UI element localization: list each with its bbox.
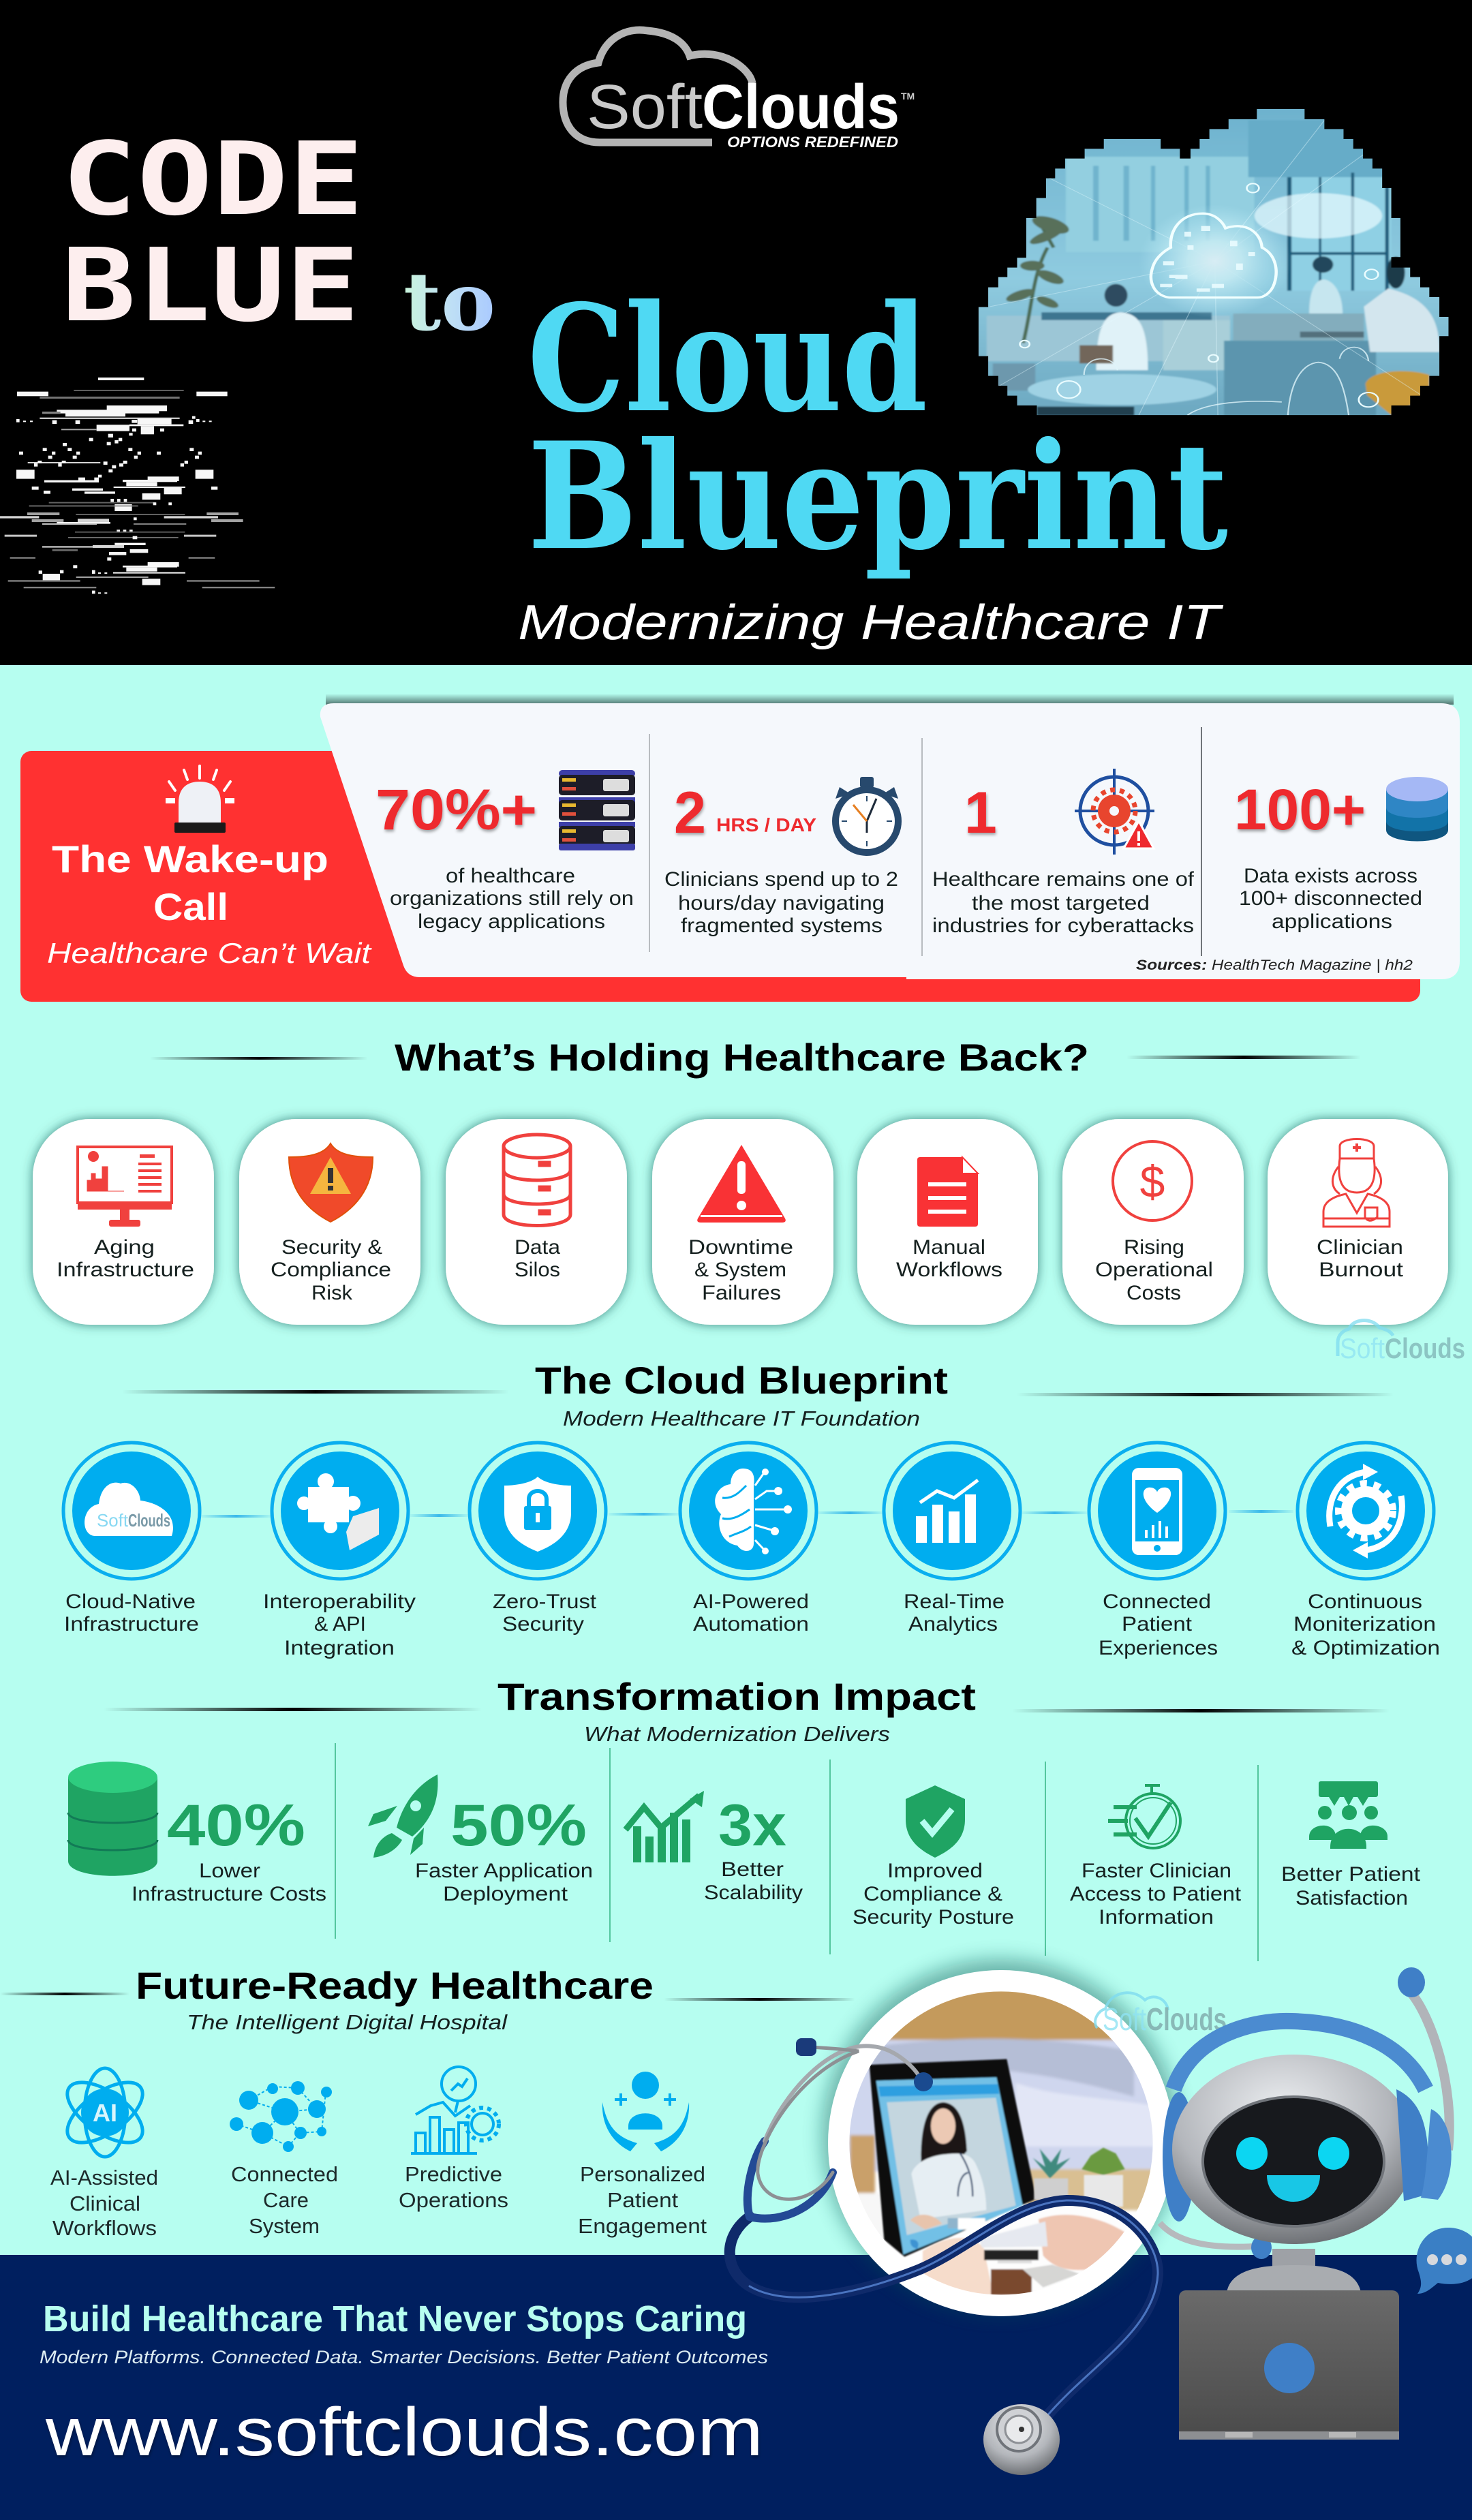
metric: compliance: Compliance &	[863, 1883, 1002, 1905]
image: pixelated cloud photo	[975, 102, 1452, 422]
card: data silos: Silos	[515, 1259, 560, 1281]
icon: cloud logo: Soft	[97, 1510, 129, 1531]
icon: database	[1386, 777, 1448, 841]
stat: 2 hrs/day: hours/day navigating	[678, 892, 885, 915]
metric: clinician access: Access to Patient	[1070, 1883, 1242, 1905]
item: connected care system	[230, 2081, 338, 2238]
metric: 40%: Lower	[199, 1860, 260, 1882]
item: ai-assisted clinical workflows: Workflows	[52, 2216, 157, 2240]
metric: compliance: Improved	[887, 1860, 983, 1882]
panel: future-ready items	[50, 2067, 707, 2240]
call to action heading: Build Healthcare That Never Stops Caring	[43, 2299, 747, 2339]
stat: 2 hrs/day: Clinicians spend up to 2	[664, 868, 898, 891]
icon: bar chart	[916, 1480, 978, 1543]
laptop	[1179, 2290, 1399, 2440]
card: rising operational costs: Rising	[1124, 1236, 1184, 1259]
panel: the wake-up call	[20, 694, 1460, 1002]
icon: growth chart	[626, 1791, 704, 1862]
icon: rocket	[368, 1774, 438, 1858]
hero panel	[0, 0, 1472, 665]
metric: patient satisfaction: Better Patient	[1281, 1863, 1421, 1886]
item: ai-assisted clinical workflows	[50, 2068, 158, 2240]
logo: SoftClouds: Soft	[587, 72, 703, 142]
item: continuous monitoring: & Optimization	[1291, 1637, 1440, 1659]
item: ai-powered automation	[680, 1443, 816, 1635]
icon: stethoscope	[730, 2038, 1158, 2418]
chat bubble	[1417, 2228, 1472, 2294]
card: rising operational costs: Operational	[1095, 1259, 1213, 1281]
antenna	[1411, 1993, 1450, 2150]
item: ai-powered automation: AI-Powered	[693, 1591, 809, 1613]
card: manual workflows	[857, 1119, 1038, 1325]
wake-up heading: The Wake-up	[52, 838, 328, 880]
card: data silos	[446, 1119, 627, 1325]
item: interoperability	[263, 1443, 416, 1659]
logo: SoftClouds: OPTIONS REDEFINED	[727, 134, 898, 151]
icon: ai brain	[715, 1469, 792, 1554]
icon: ai atom	[57, 2068, 153, 2157]
icon: dollar: $	[1140, 1156, 1165, 1207]
icon: check shield	[906, 1785, 965, 1858]
icon: shield warning	[289, 1143, 373, 1222]
icon: lock shield	[504, 1477, 571, 1552]
footer band	[0, 2255, 1472, 2520]
stat: 1	[932, 769, 1195, 937]
title: Cloud: Cloud	[527, 272, 927, 445]
head	[1172, 2055, 1416, 2244]
eyes	[1236, 2137, 1349, 2170]
metric: clinician access	[1070, 1785, 1242, 1929]
watermark logo: Soft	[1340, 1332, 1385, 1364]
heading: future-ready healthcare: Future-Ready Healthcare	[136, 1964, 654, 2007]
heading: transformation impact	[104, 1675, 1390, 1718]
card: security and compliance: Risk	[311, 1282, 353, 1304]
subheading: foundation: Modern Healthcare IT Foundation	[563, 1407, 920, 1430]
item: interoperability: & API	[314, 1613, 366, 1635]
item: connected care system: System	[249, 2214, 320, 2238]
item: connected care system: Connected	[231, 2162, 338, 2186]
item: zero-trust security: Security	[502, 1613, 584, 1635]
left earcup	[1163, 2092, 1195, 2222]
stat: 1: industries for cyberattacks	[932, 915, 1194, 937]
card: aging infrastructure: Aging	[94, 1236, 155, 1259]
logo: SoftClouds	[563, 30, 915, 151]
stat: 100+: applications	[1272, 910, 1392, 933]
card: manual workflows: Workflows	[896, 1259, 1002, 1281]
title: to: to	[403, 254, 495, 349]
card: rising operational costs: Costs	[1126, 1282, 1181, 1304]
card: security and compliance	[239, 1119, 420, 1325]
item: real-time analytics: Real-Time	[904, 1591, 1005, 1613]
icon: ai atom: AI	[93, 2099, 117, 2127]
stat: 100+: 100+	[1234, 778, 1366, 842]
icon: phone heart	[1132, 1468, 1182, 1555]
metric: 50%: 50%	[450, 1793, 587, 1858]
card: security and compliance: Security &	[281, 1236, 382, 1259]
item: cloud-native infrastructure	[63, 1443, 200, 1635]
heading: what's holding healthcare back: What’s Holding Healthcare Back?	[395, 1036, 1089, 1079]
watermark logo: footer area: Clouds	[1146, 2001, 1227, 2037]
icon: database	[68, 1762, 157, 1876]
card: downtime: & System	[694, 1259, 786, 1281]
icon: cyber target	[1075, 769, 1154, 855]
wake-up subheading: Healthcare Can’t Wait	[47, 937, 373, 969]
face	[1203, 2097, 1384, 2226]
panel: blueprint circles	[63, 1443, 1440, 1659]
icon: fast timer	[1108, 1785, 1180, 1848]
item: real-time analytics: Analytics	[908, 1613, 998, 1635]
stat: 70%: organizations still rely on	[390, 887, 634, 910]
stat: 2 hrs/day	[664, 777, 902, 937]
photo: telehealth circle	[822, 1959, 1179, 2316]
metric: clinician access: Information	[1099, 1906, 1214, 1929]
sources: Sources: HealthTech Magazine | hh2	[1136, 957, 1413, 973]
metric: 50%	[368, 1774, 593, 1905]
card: clinician burnout: Clinician	[1317, 1236, 1403, 1259]
item: cloud-native infrastructure: Cloud-Native	[65, 1591, 196, 1613]
stat: 100+	[1234, 777, 1448, 933]
stat: 100+: 100+ disconnected	[1239, 887, 1422, 910]
item: continuous monitoring: Moniterization	[1293, 1613, 1436, 1635]
icon: gear cycle	[1330, 1464, 1402, 1558]
card: security and compliance: Compliance	[271, 1259, 391, 1281]
icon: document	[917, 1157, 978, 1227]
stat: 1: 1	[964, 780, 997, 846]
stat: 1: the most targeted	[972, 892, 1150, 915]
item: personalized patient engagement: Patient	[607, 2188, 678, 2212]
metric: 40%: Infrastructure Costs	[132, 1883, 326, 1905]
item: ai-assisted clinical workflows: Clinical	[70, 2192, 140, 2215]
logo: SoftClouds: TM	[901, 91, 915, 102]
red banner	[20, 751, 1420, 1002]
item: continuous monitoring: Continuous	[1308, 1591, 1422, 1613]
metric: 3x: Better	[721, 1858, 784, 1881]
stat: 70%: 70%+	[375, 778, 537, 842]
icon: person in hands	[602, 2072, 689, 2151]
item: personalized patient engagement: Personalized	[580, 2162, 705, 2186]
icon: network	[230, 2081, 332, 2152]
icon: cloud logo: Clouds	[128, 1510, 170, 1531]
stat: 70%: legacy applications	[418, 910, 605, 933]
icon: puzzle	[297, 1473, 379, 1550]
stat: 70%: of healthcare	[446, 865, 575, 887]
heading: transformation impact: Transformation Impact	[497, 1675, 976, 1718]
stat: 2 hrs/day: HRS / DAY	[716, 814, 816, 835]
stat: 100+: Data exists across	[1244, 865, 1417, 887]
icon: cloud logo	[85, 1483, 173, 1536]
metric: 40%: 40%	[167, 1793, 305, 1858]
shoulders	[1227, 2265, 1361, 2292]
title: Blueprint: Blueprint	[527, 410, 1228, 583]
item: zero-trust security: Zero-Trust	[493, 1591, 597, 1613]
heading: the cloud blueprint	[122, 1359, 1394, 1402]
card: clinician burnout	[1268, 1119, 1448, 1325]
card: downtime	[652, 1119, 833, 1325]
neck	[1272, 2249, 1315, 2276]
headset band	[1174, 2021, 1426, 2089]
item: ai-assisted clinical workflows: AI-Assisted	[50, 2166, 158, 2189]
item: real-time analytics	[884, 1443, 1020, 1635]
metric: 40%	[68, 1762, 326, 1905]
heading: the cloud blueprint: The Cloud Blueprint	[535, 1359, 948, 1402]
card: rising operational costs	[1062, 1119, 1244, 1325]
icon: warning triangle	[697, 1145, 786, 1223]
metric: compliance	[853, 1785, 1014, 1929]
card: aging infrastructure: Infrastructure	[57, 1259, 194, 1281]
panel: impact metrics	[68, 1743, 1421, 1961]
card: manual workflows: Manual	[913, 1236, 985, 1259]
right earcup	[1396, 2089, 1452, 2201]
stat: 2 hrs/day: fragmented systems	[681, 915, 883, 937]
stat: 1: Healthcare remains one of	[932, 868, 1195, 891]
panel: the wake-up call: Call	[153, 885, 228, 928]
icon: stopwatch	[832, 777, 902, 856]
item: connected patient experiences: Patient	[1122, 1613, 1193, 1635]
subheading: digital hospital: The Intelligent Digital Hospital	[187, 2010, 508, 2034]
watermark logo: footer area: Soft	[1103, 2001, 1146, 2037]
card: aging infrastructure	[33, 1119, 214, 1325]
metric: 3x: Scalability	[704, 1881, 803, 1904]
item: ai-powered automation: Automation	[693, 1613, 809, 1635]
call to action subline: Modern Platforms. Connected Data. Smarter Decisions. Better Patient Outcomes	[40, 2347, 768, 2367]
mic boom	[1160, 2223, 1260, 2247]
metric: patient satisfaction: Satisfaction	[1295, 1887, 1408, 1909]
item: connected patient experiences	[1089, 1443, 1225, 1659]
icon: monitor	[78, 1147, 172, 1227]
watermark logo: footer area	[1095, 1993, 1227, 2037]
mouth	[1267, 2175, 1320, 2202]
website url: www.softclouds.com	[45, 2394, 763, 2470]
metric: patient satisfaction	[1281, 1781, 1421, 1909]
item: personalized patient engagement	[578, 2072, 707, 2238]
item: interoperability: Integration	[284, 1637, 395, 1659]
metric: 3x	[626, 1791, 803, 1904]
icon: siren	[166, 766, 234, 833]
item: continuous monitoring	[1291, 1443, 1440, 1659]
icon: dollar	[1113, 1141, 1192, 1220]
item: predictive operations: Predictive	[405, 2162, 502, 2186]
icon: nurse	[1323, 1139, 1390, 1227]
icon: predictive chart	[411, 2067, 499, 2153]
item: connected care system: Care	[263, 2188, 309, 2212]
white stats card	[320, 694, 1460, 979]
metric: compliance: Security Posture	[853, 1906, 1014, 1929]
heading: what's holding healthcare back	[150, 1036, 1361, 1079]
illustration: robot	[1160, 1967, 1472, 2440]
card: downtime: Failures	[702, 1282, 781, 1304]
title: Blue: BLUE	[61, 227, 360, 344]
item: connected patient experiences: Connected	[1103, 1591, 1211, 1613]
item: personalized patient engagement: Engagement	[578, 2214, 707, 2238]
item: connected patient experiences: Experiences	[1099, 1637, 1218, 1659]
item: predictive operations: Operations	[399, 2188, 508, 2212]
icon: servers	[559, 770, 635, 850]
stat: 2 hrs/day: 2	[674, 780, 706, 846]
panel: barriers	[33, 1119, 1465, 1364]
stat: 70%	[375, 770, 635, 933]
metric: 50%: Deployment	[443, 1883, 568, 1905]
subtitle: Modernizing Healthcare IT	[518, 596, 1224, 650]
metric: clinician access: Faster Clinician	[1082, 1860, 1231, 1882]
watermark logo	[1338, 1321, 1465, 1364]
card: data silos: Data	[515, 1236, 560, 1259]
logo: SoftClouds: Clouds	[702, 72, 900, 142]
item: zero-trust security	[470, 1443, 606, 1635]
metric: 3x: 3x	[718, 1793, 786, 1858]
title: Code: CODE	[61, 121, 364, 238]
icon: stethoscope chestpiece	[983, 2404, 1060, 2475]
item: cloud-native infrastructure: Infrastructure	[64, 1613, 199, 1635]
item: interoperability: Interoperability	[263, 1591, 416, 1613]
heading: future-ready healthcare	[0, 1964, 855, 2007]
item: predictive operations	[399, 2067, 508, 2212]
decorative glitch graphic	[0, 378, 275, 594]
subheading: delivers: What Modernization Delivers	[584, 1722, 890, 1746]
icon: database outline	[504, 1135, 570, 1225]
metric: 50%: Faster Application	[415, 1860, 593, 1882]
card: downtime: Downtime	[688, 1236, 793, 1259]
card: clinician burnout: Burnout	[1319, 1259, 1404, 1281]
icon: rated group	[1309, 1781, 1387, 1849]
